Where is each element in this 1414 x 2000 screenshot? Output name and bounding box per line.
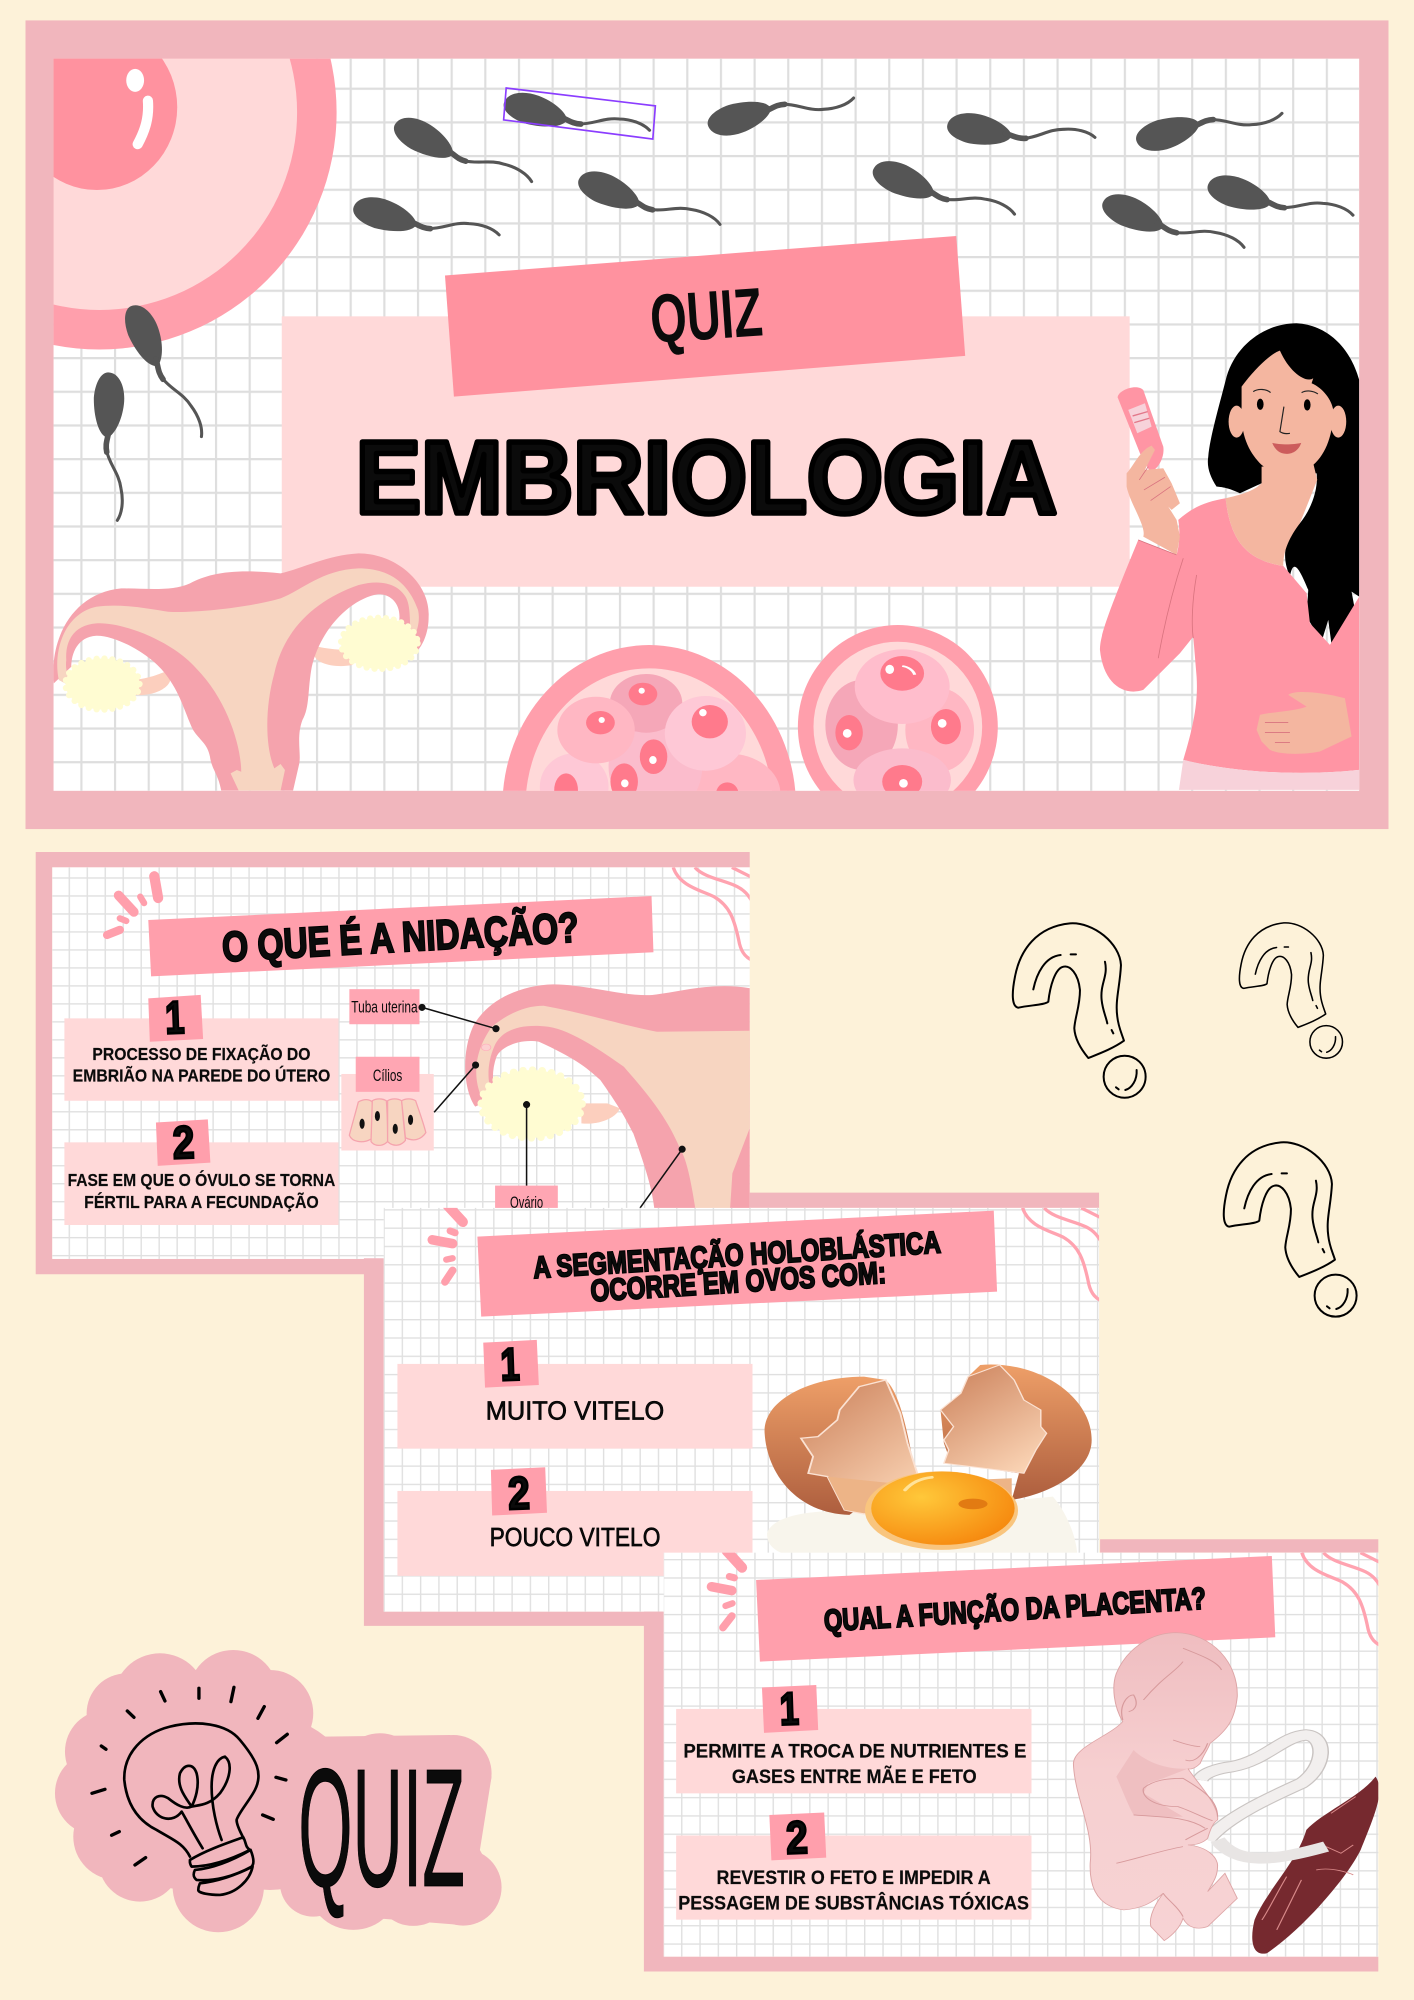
umbilical cord xyxy=(1200,1735,1321,1840)
decorative spark xyxy=(711,1551,742,1628)
question banner: QUAL A FUNÇÃO DA PLACENTA? xyxy=(823,1581,1207,1638)
panel: slide 3 placenta xyxy=(644,1539,1381,1972)
diagram pointer lines xyxy=(419,1005,685,1208)
placenta xyxy=(1252,1777,1379,1954)
diagram label: cilios with cells: Cílios xyxy=(373,1066,402,1085)
diagram label: tuba uterina xyxy=(349,989,419,1024)
diagram label: cilios with cells xyxy=(341,1057,434,1151)
panel: quiz cover slide xyxy=(26,20,1388,830)
slide 1 frame xyxy=(36,852,750,1274)
option 1 xyxy=(397,1338,753,1449)
selection outline xyxy=(504,88,655,139)
hair xyxy=(1208,323,1359,645)
ovary xyxy=(481,1070,582,1138)
test stick xyxy=(1118,387,1164,472)
option 1: 1 xyxy=(500,1338,520,1390)
decorative waves xyxy=(1302,1553,1381,1646)
question banner: O QUE É A NIDAÇÃO? xyxy=(221,904,580,970)
option 2 xyxy=(397,1467,753,1576)
diagram label: tuba uterina: Tuba uterina xyxy=(351,998,418,1017)
cover frame xyxy=(26,20,1388,829)
diagram label: ovario: Ovário xyxy=(510,1193,543,1212)
illustration: uterus diagram xyxy=(465,984,750,1210)
decorative spark xyxy=(432,1205,463,1282)
question banner: A SEGMENTAÇÃO HOLOBLÁSTICA xyxy=(532,1225,942,1285)
icon: question mark bottom xyxy=(1224,1142,1357,1317)
hand on belly xyxy=(1257,692,1352,754)
decorative spark xyxy=(107,876,158,935)
option 1: PROCESSO DE FIXAÇÃO DO xyxy=(92,1043,311,1064)
neck and chest xyxy=(1226,463,1317,566)
option 2: 2 xyxy=(507,1467,531,1519)
option 2: FASE EM QUE O ÓVULO SE TORNA xyxy=(68,1169,335,1190)
option 2: PESSAGEM DE SUBSTÂNCIAS TÓXICAS xyxy=(678,1892,1029,1914)
illustration: cracked egg xyxy=(765,1364,1092,1555)
option 1: 1 xyxy=(779,1682,800,1735)
option 2: 2 xyxy=(172,1116,195,1169)
slide 3 frame xyxy=(644,1539,1378,1972)
banner: quiz: QUIZ xyxy=(648,273,765,358)
panel: slide 1 nidacao xyxy=(36,852,752,1274)
fetus silhouette xyxy=(1073,1633,1237,1941)
banner: quiz xyxy=(445,236,965,397)
question banner xyxy=(756,1556,1275,1662)
panel: slide 2 segmentacao xyxy=(364,1193,1102,1626)
option 2: REVESTIR O FETO E IMPEDIR A xyxy=(717,1868,991,1889)
skirt xyxy=(1179,760,1359,790)
option 1: 1 xyxy=(164,991,185,1043)
option 1: MUITO VITELO xyxy=(486,1398,664,1426)
icon: bulb rays xyxy=(92,1687,287,1865)
chest shading xyxy=(1116,1750,1188,1817)
title: EMBRIOLOGIA xyxy=(356,419,1057,535)
face xyxy=(1229,406,1245,438)
icon: question mark top left xyxy=(1013,923,1146,1098)
raised hand xyxy=(1127,446,1180,555)
decorative waves xyxy=(673,867,752,960)
illustration: group of sperm cells xyxy=(87,92,1355,520)
shirt xyxy=(1100,498,1359,773)
question banner: OCORRE EM OVOS COM: xyxy=(590,1256,887,1308)
illustration: woman holding pregnancy test xyxy=(1100,323,1359,790)
icon: light bulb xyxy=(124,1723,259,1895)
option 1: GASES ENTRE MÃE E FETO xyxy=(732,1766,977,1788)
option 1: EMBRIÃO NA PAREDE DO ÚTERO xyxy=(73,1065,330,1086)
illustration: morula cells left xyxy=(503,645,796,791)
option 2: POUCO VITELO xyxy=(490,1524,660,1552)
option 2: FÉRTIL PARA A FECUNDAÇÃO xyxy=(84,1191,319,1212)
title background xyxy=(282,316,1130,587)
fetus details xyxy=(1116,1648,1221,1917)
albumen xyxy=(767,1497,1077,1555)
icon: question mark top right xyxy=(1239,923,1342,1058)
illustration: morula cells right xyxy=(798,625,998,791)
option 2: 2 xyxy=(785,1811,809,1864)
slide 2 frame xyxy=(364,1193,1099,1626)
yolk xyxy=(865,1471,1018,1550)
option 1: PERMITE A TROCA DE NUTRIENTES E xyxy=(683,1742,1026,1763)
illustration: large egg cell xyxy=(54,58,337,350)
question banner xyxy=(477,1211,997,1317)
illustration: uterus xyxy=(53,553,429,791)
sticker background xyxy=(55,1650,502,1932)
sticker: bulb quiz xyxy=(55,1650,502,1932)
diagram label: ovario xyxy=(495,1186,558,1212)
illustration: fetus with cord and placenta xyxy=(1073,1633,1379,1954)
option 1 xyxy=(64,991,339,1101)
right shell xyxy=(941,1364,1092,1500)
option 2 xyxy=(64,1116,339,1225)
sticker: bulb quiz: QUIZ xyxy=(298,1734,465,1922)
left shell xyxy=(765,1377,915,1515)
option 1 xyxy=(676,1682,1031,1793)
option 2 xyxy=(676,1811,1031,1920)
decorative waves xyxy=(1023,1208,1102,1301)
